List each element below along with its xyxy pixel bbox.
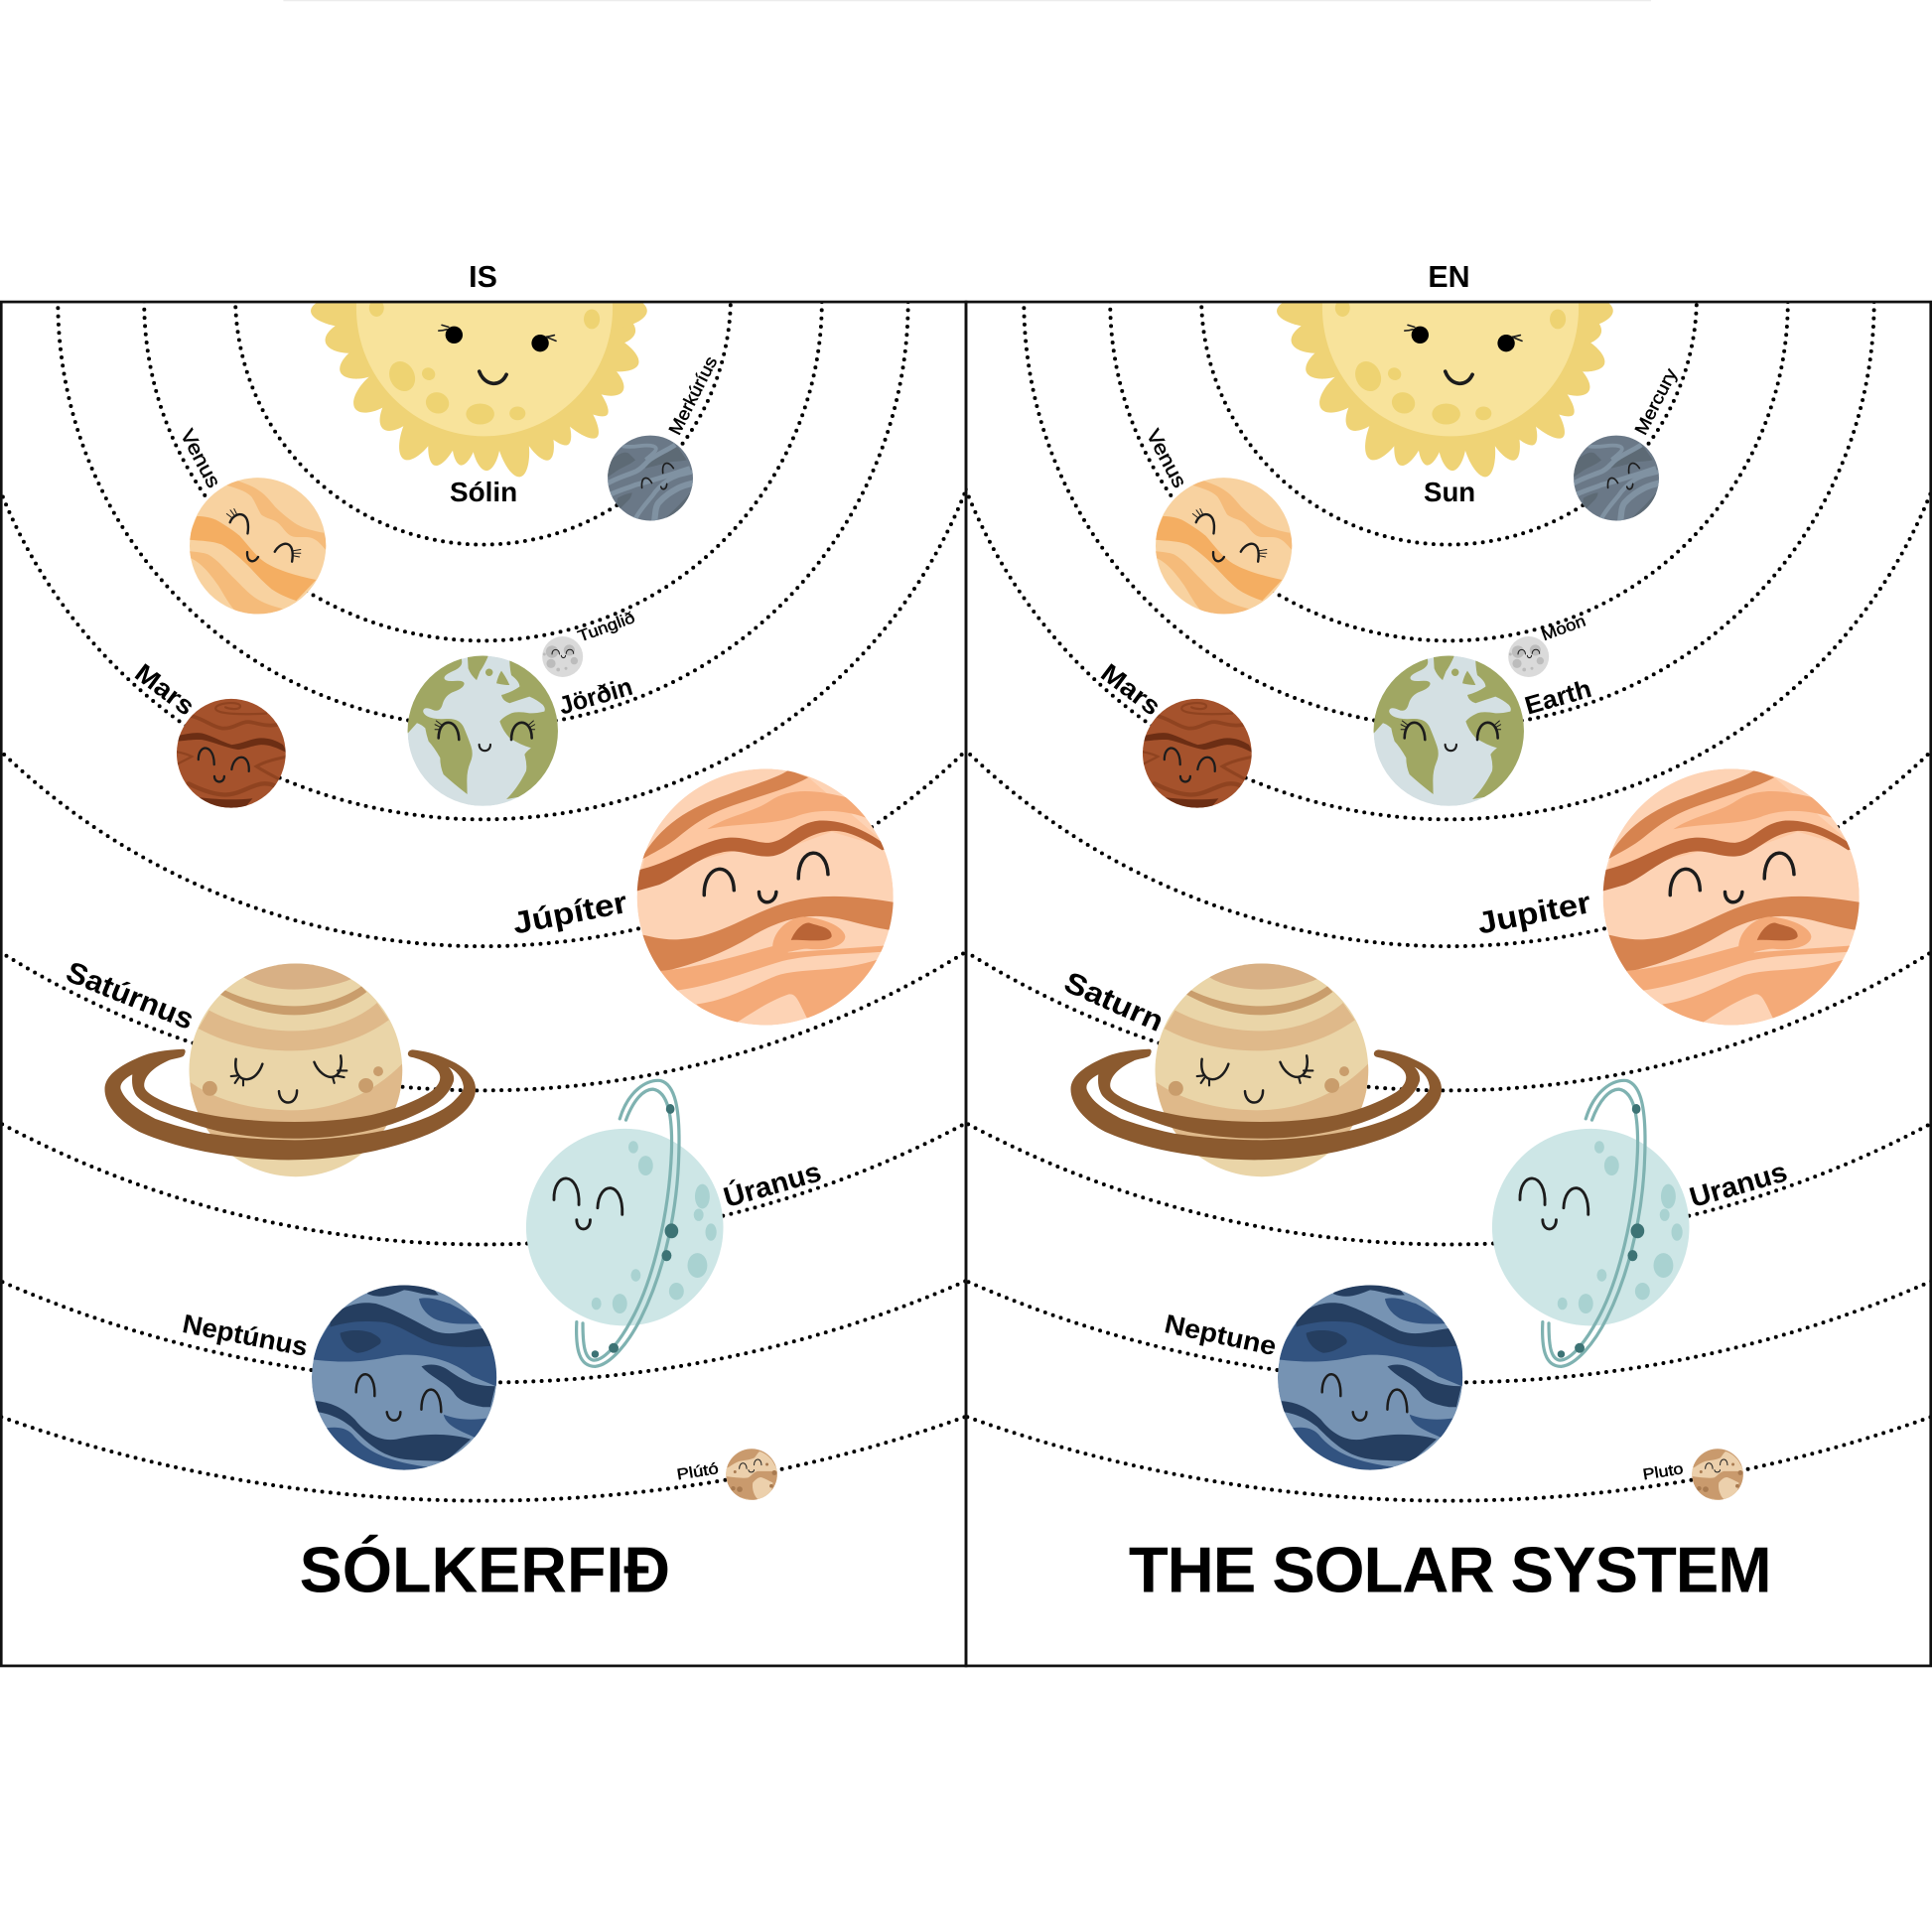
label: Mars: Mars — [129, 657, 201, 721]
label: Neptúnus: Neptúnus — [180, 1309, 310, 1362]
icon: Pluto — [1688, 1449, 1744, 1506]
icon: Mars — [1140, 698, 1253, 813]
icon: Earth — [1363, 647, 1533, 806]
icon: sun — [1277, 180, 1613, 481]
label: Uranus: Uranus — [1686, 1157, 1791, 1214]
label: Sólin: Sólin — [450, 477, 517, 507]
label: Plútó: Plútó — [676, 1460, 720, 1483]
label: Neptune: Neptune — [1162, 1309, 1279, 1361]
icon: Moon — [1508, 636, 1549, 677]
panel: Icelandic solar system — [2, 266, 965, 1592]
orbit lines — [2, 303, 1930, 1503]
icon: Venus — [188, 477, 331, 619]
label: Pluto: Pluto — [1642, 1460, 1685, 1483]
label: Merkúríus: Merkúríus — [665, 353, 721, 438]
icon: Neptune — [308, 1279, 499, 1473]
icon: Uranus — [1492, 1080, 1690, 1366]
label: Venus: Venus — [1142, 426, 1190, 491]
icon: Mars — [174, 698, 287, 813]
label: Jörðin: Jörðin — [556, 673, 635, 721]
label: Mercury: Mercury — [1631, 365, 1681, 438]
title: Sólkerfið: SÓLKERFIÐ — [300, 1533, 670, 1605]
icon: Moon — [542, 636, 583, 677]
label: Sun: Sun — [1424, 477, 1475, 507]
orbit lines — [22, 0, 1932, 1501]
icon: Mercury — [607, 435, 697, 523]
label: Tunglið: Tunglið — [576, 609, 637, 645]
icon: Saturn — [104, 949, 476, 1177]
label: Júpíter: Júpíter — [509, 885, 630, 941]
label: Moon: Moon — [1539, 612, 1588, 644]
label: Venus: Venus — [176, 426, 224, 491]
panel frames — [1, 302, 1931, 1666]
heading: EN: EN — [1428, 260, 1470, 294]
title: The Solar System: THE SOLAR SYSTEM — [1129, 1533, 1772, 1605]
label: Saturn: Saturn — [1059, 966, 1169, 1038]
icon: Jupiter — [633, 768, 899, 1029]
icon: Saturn — [1070, 949, 1442, 1177]
icon: Uranus — [526, 1080, 724, 1366]
label: Úranus: Úranus — [720, 1157, 825, 1214]
heading: IS: IS — [469, 260, 497, 294]
label: Satúrnus: Satúrnus — [62, 956, 199, 1036]
icon: Venus — [1154, 477, 1297, 619]
icon: Mercury — [1573, 435, 1663, 523]
icon: Jupiter — [1599, 768, 1865, 1029]
icon: sun — [311, 180, 647, 481]
icon: Neptune — [1274, 1279, 1465, 1473]
icon: Earth — [397, 647, 567, 806]
label: Mars: Mars — [1095, 657, 1167, 721]
label: Earth: Earth — [1522, 675, 1594, 721]
label: Jupiter: Jupiter — [1474, 885, 1593, 941]
icon: Pluto — [722, 1449, 778, 1506]
